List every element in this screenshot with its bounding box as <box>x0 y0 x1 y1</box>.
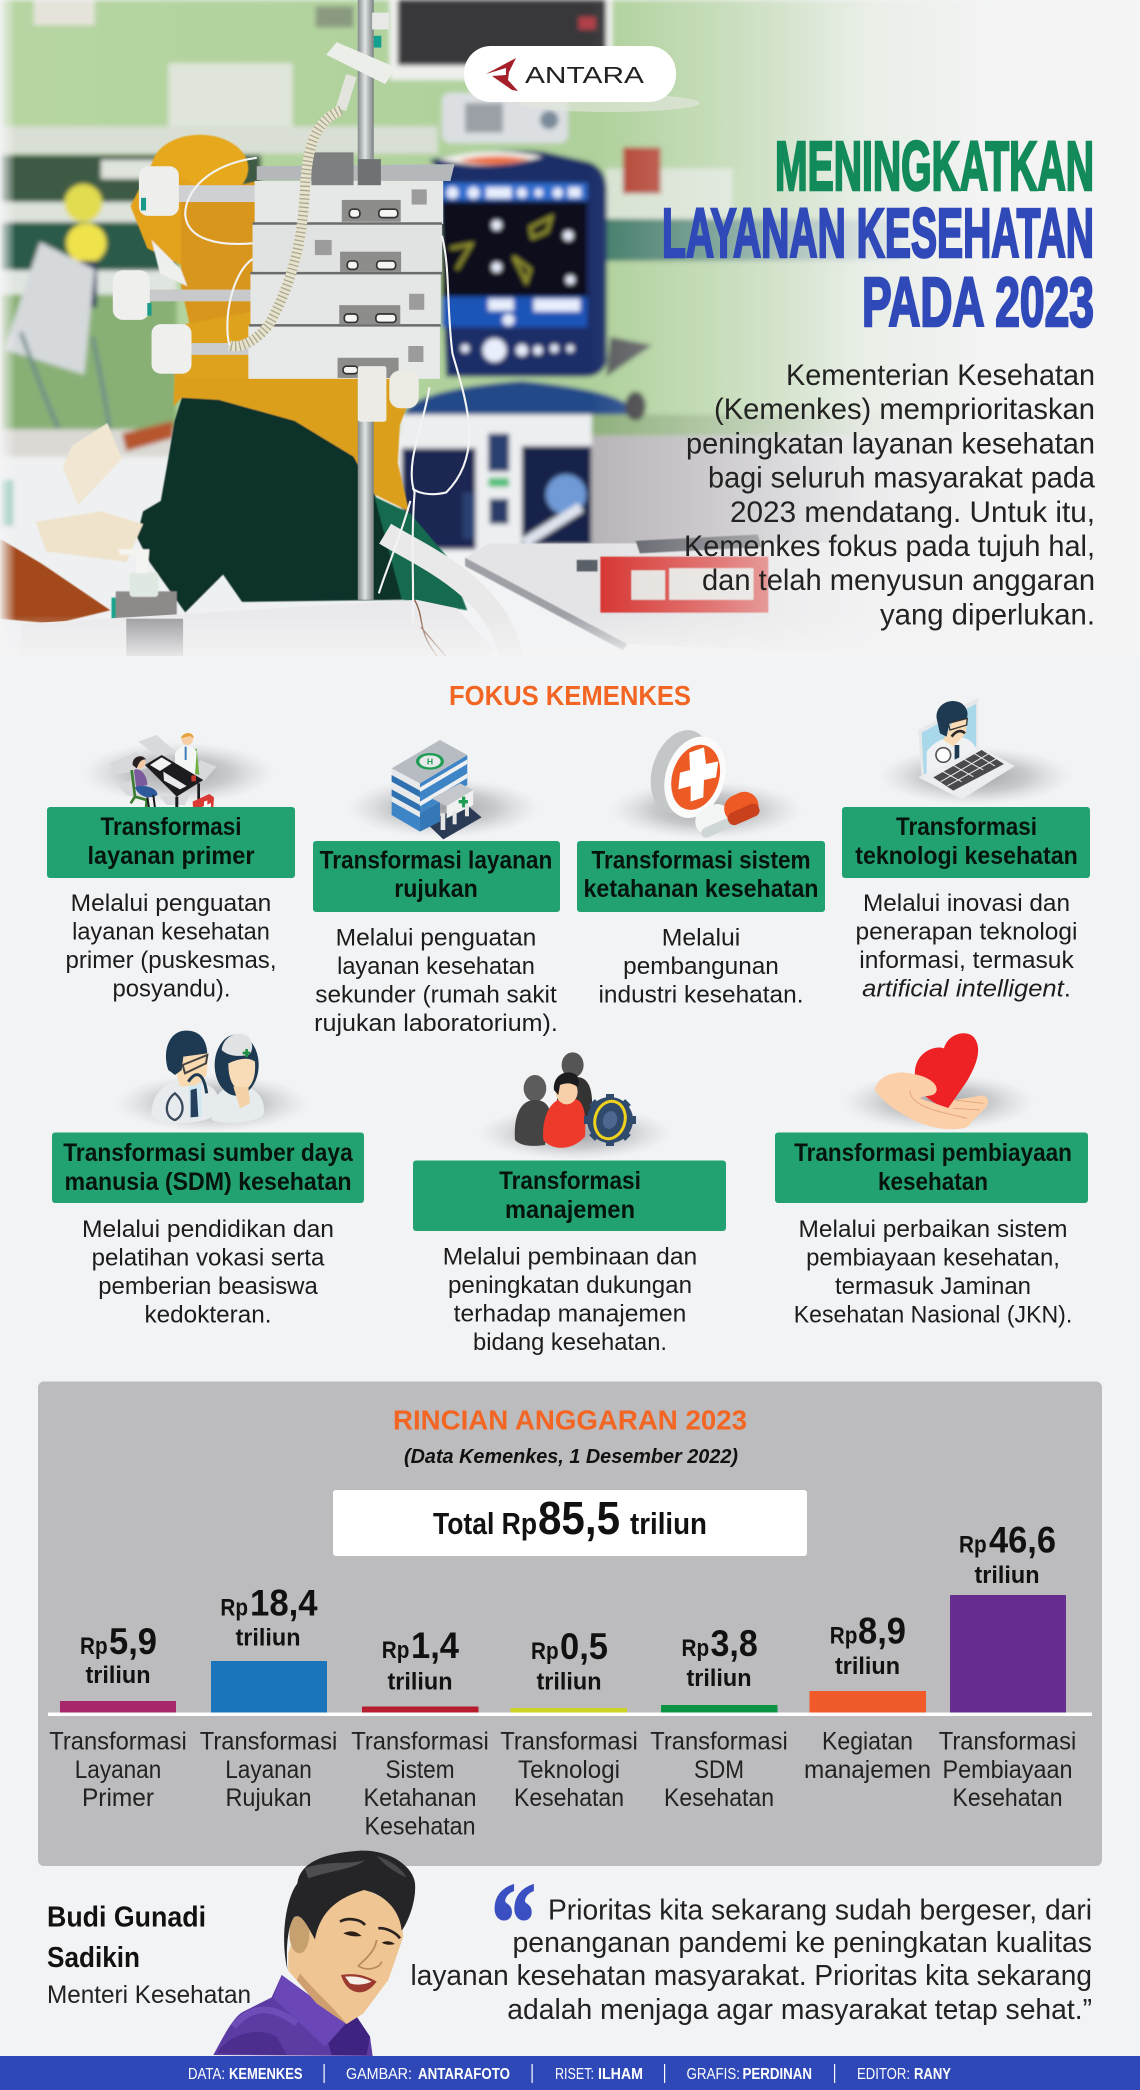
bar chart: Rp <box>220 1594 248 1622</box>
card: transformasi sumber daya manusia: pemberian beasiswa <box>98 1273 318 1300</box>
bar labels: Kegiatan <box>822 1728 913 1756</box>
card: transformasi layanan rujukan: rujukan <box>394 875 478 903</box>
card: transformasi teknologi kesehatan: Transformasi <box>896 813 1037 841</box>
heading: fokus kemenkes: FOKUS KEMENKES <box>449 680 691 711</box>
bar labels: Kesehatan <box>664 1784 774 1812</box>
bar chart: triliun <box>536 1668 602 1696</box>
card: transformasi manajemen: bidang kesehatan. <box>473 1329 667 1356</box>
card: transformasi layanan primer: layanan kesehatan <box>72 918 270 946</box>
total box: 85,5 <box>538 1492 620 1544</box>
antara logo pill: ANTARA <box>525 62 645 88</box>
bar labels: Transformasi <box>939 1728 1076 1756</box>
icon: people and gear <box>515 1052 592 1148</box>
quote text: Prioritas kita sekarang sudah bergeser, dari <box>548 1894 1092 1926</box>
bar chart: triliun <box>835 1653 900 1680</box>
card: transformasi layanan rujukan: Transformasi layanan <box>320 846 552 874</box>
quote text: penanganan pandemi ke peningkatan kualitas <box>512 1927 1092 1959</box>
card: transformasi layanan primer: layanan primer <box>88 842 255 870</box>
intro text: bagi seluruh masyarakat pada <box>708 462 1095 494</box>
bar chart: 0,5 <box>560 1626 608 1667</box>
minister name: Menteri Kesehatan <box>47 1981 251 2009</box>
card: transformasi sumber daya manusia: Transformasi sumber daya <box>63 1139 354 1167</box>
bar chart: triliun <box>236 1624 300 1652</box>
total box: Total Rp <box>433 1506 537 1541</box>
intro text: (Kemenkes) memprioritaskan <box>714 393 1095 426</box>
card: transformasi teknologi kesehatan: informasi, termasuk <box>859 947 1075 974</box>
heading: rincian anggaran: RINCIAN ANGGARAN 2023 <box>393 1404 747 1436</box>
bed rails <box>379 524 514 628</box>
card: transformasi layanan primer: posyandu). <box>112 976 230 1002</box>
card: transformasi layanan primer: primer (puskesmas, <box>66 947 276 974</box>
footer credits: KEMENKES <box>229 2066 303 2083</box>
minister name <box>47 1902 251 2009</box>
card: transformasi manajemen: terhadap manajemen <box>454 1300 686 1328</box>
card: transformasi sumber daya manusia: pelatihan vokasi serta <box>92 1244 325 1272</box>
card: transformasi teknologi kesehatan: Melalui inovasi dan <box>863 890 1070 917</box>
card: transformasi pembiayaan kesehatan: Kesehatan Nasional (JKN). <box>794 1302 1072 1328</box>
bar chart <box>48 1520 1092 1716</box>
footer credits: EDITOR: <box>857 2066 910 2083</box>
bar labels: Layanan <box>225 1756 312 1784</box>
card: transformasi layanan rujukan: sekunder (rumah sakit <box>315 982 557 1008</box>
bar labels: SDM <box>694 1756 744 1784</box>
icon: hand holding heart <box>875 1033 988 1129</box>
intro text: yang diperlukan. <box>880 598 1095 632</box>
bar labels: Transformasi <box>49 1728 187 1756</box>
source note: (Data Kemenkes, 1 Desember 2022) <box>404 1446 738 1468</box>
card: transformasi layanan primer: Transformasi <box>100 813 242 841</box>
intro text: Kementerian Kesehatan <box>786 359 1095 392</box>
bar chart: Rp <box>959 1532 987 1558</box>
bar chart: 3,8 <box>710 1623 758 1664</box>
nurse <box>0 134 859 650</box>
bar labels: Rujukan <box>226 1784 312 1812</box>
bar chart: 5,9 <box>109 1621 157 1662</box>
intro text <box>684 359 1095 632</box>
bar labels: Transformasi <box>500 1728 638 1756</box>
bar chart: triliun <box>686 1665 752 1692</box>
card: transformasi layanan rujukan: rujukan laboratorium). <box>314 1010 558 1037</box>
card: transformasi pembiayaan kesehatan: Melalui perbaikan sistem <box>798 1216 1068 1243</box>
footer credits <box>0 2056 1140 2090</box>
card: transformasi teknologi kesehatan <box>842 697 1090 1002</box>
card: transformasi manajemen: peningkatan dukungan <box>448 1272 692 1299</box>
card: transformasi sistem ketahanan kesehatan: industri kesehatan. <box>598 982 804 1008</box>
intro text: Kemenkes fokus pada tujuh hal, <box>684 530 1095 563</box>
bar labels: Transformasi <box>351 1728 489 1756</box>
total box: triliun <box>630 1506 707 1541</box>
card: transformasi layanan rujukan <box>313 740 560 1037</box>
card: transformasi manajemen: manajemen <box>505 1196 635 1224</box>
card: transformasi layanan rujukan: Melalui penguatan <box>336 924 536 952</box>
bar chart: 46,6 <box>989 1520 1056 1560</box>
footer credits: GAMBAR: <box>346 2066 412 2083</box>
card: transformasi pembiayaan kesehatan: Transformasi pembiayaan <box>794 1139 1072 1167</box>
bar labels: Primer <box>82 1784 154 1812</box>
monitor <box>429 150 607 377</box>
bar chart: Rp <box>531 1638 559 1665</box>
bar labels: Kesehatan <box>364 1812 476 1840</box>
bar labels: Teknologi <box>518 1756 620 1784</box>
card: transformasi layanan rujukan: layanan kesehatan <box>337 953 535 980</box>
card: transformasi pembiayaan kesehatan <box>775 1033 1088 1328</box>
icon: quote mark: “ <box>491 1860 536 1986</box>
bar chart: triliun <box>388 1668 452 1696</box>
background items <box>389 0 612 80</box>
footer credits: ANTARAFOTO <box>418 2066 510 2083</box>
card: transformasi sumber daya manusia: Melalui pendidikan dan <box>82 1216 334 1243</box>
bar chart: 1,4 <box>411 1625 459 1666</box>
icon: doctor on laptop <box>918 697 1015 799</box>
card: transformasi pembiayaan kesehatan: kesehatan <box>878 1168 988 1196</box>
bar labels <box>49 1728 1076 1840</box>
icon: hospital building: H <box>427 756 433 766</box>
card: transformasi sistem ketahanan kesehatan: ketahanan kesehatan <box>584 875 818 903</box>
quote text <box>410 1894 1092 2026</box>
patient bed <box>0 434 400 661</box>
card: transformasi pembiayaan kesehatan: termasuk Jaminan <box>835 1273 1031 1300</box>
footer credits: RANY <box>914 2066 951 2083</box>
bar labels: Layanan <box>75 1756 161 1784</box>
card: transformasi teknologi kesehatan: artificial intelligent . <box>862 976 1071 1002</box>
photo fades <box>590 0 1140 656</box>
quote text: adalah menjaga agar masyarakat tetap sehat.” <box>507 1994 1092 2026</box>
footer credits: ILHAM <box>598 2066 643 2083</box>
card: transformasi teknologi kesehatan: teknologi kesehatan <box>855 842 1078 870</box>
intro text: dan telah menyusun anggaran <box>702 564 1095 597</box>
card: transformasi sistem ketahanan kesehatan: Melalui <box>662 924 740 952</box>
card: transformasi pembiayaan kesehatan: pembiayaan kesehatan, <box>806 1244 1060 1272</box>
footer credits: RISET: <box>555 2066 594 2083</box>
bar chart: triliun <box>974 1562 1040 1589</box>
card: transformasi manajemen: Transformasi <box>499 1167 641 1195</box>
card: transformasi layanan primer: Melalui penguatan <box>71 890 271 917</box>
icon: minister portrait <box>213 1851 415 2056</box>
sanitizer <box>112 598 124 621</box>
panel: rincian anggaran <box>38 1382 1102 1866</box>
card: transformasi sumber daya manusia: manusia (SDM) kesehatan <box>64 1168 352 1196</box>
card: transformasi sistem ketahanan kesehatan: Transformasi sistem <box>592 846 810 874</box>
bar chart: triliun <box>86 1662 150 1689</box>
header photo: nurse beside IV pole and patient monitor <box>0 0 942 656</box>
footer credits: PERDINAN <box>742 2066 812 2083</box>
card: transformasi manajemen: Melalui pembinaan dan <box>443 1244 697 1270</box>
icon: antara logo mark <box>486 58 518 91</box>
card: transformasi layanan primer <box>47 733 295 1002</box>
total box <box>333 1490 807 1556</box>
bar chart: Rp <box>830 1622 857 1650</box>
icon: doctor and nurse <box>152 1031 264 1123</box>
ventilator stand <box>404 381 631 415</box>
bar labels: Kesehatan <box>952 1784 1062 1812</box>
card: transformasi sumber daya manusia: kedokteran. <box>144 1302 272 1328</box>
table and red box <box>465 542 1010 660</box>
bar labels: Kesehatan <box>514 1784 624 1812</box>
bar labels: Pembiayaan <box>942 1756 1072 1784</box>
bar chart: 8,9 <box>858 1610 906 1652</box>
icon: doctor consultation at desk <box>110 733 217 816</box>
bar labels: Transformasi <box>650 1728 788 1756</box>
icon: gear <box>584 1094 636 1146</box>
title box <box>47 807 295 878</box>
minister name: Budi Gunadi <box>47 1902 206 1934</box>
card: transformasi sumber daya manusia <box>52 1031 364 1328</box>
bar chart: Rp <box>382 1637 409 1664</box>
bar chart: 18,4 <box>250 1582 318 1624</box>
antara logo pill <box>464 46 700 112</box>
footer credits: GRAFIS: <box>686 2066 740 2083</box>
bar labels: manajemen <box>804 1756 931 1784</box>
icon: hospital building <box>392 740 482 839</box>
card: transformasi manajemen <box>413 1052 726 1356</box>
icon: medical sign and capsule <box>641 722 763 840</box>
bar labels: Ketahanan <box>364 1784 476 1812</box>
card: transformasi teknologi kesehatan: penerapan teknologi <box>856 918 1078 946</box>
intro text: 2023 mendatang. Untuk itu, <box>730 496 1095 529</box>
quote text: layanan kesehatan masyarakat. Prioritas kita sekarang <box>410 1960 1092 1992</box>
minister name: Sadikin <box>47 1942 140 1974</box>
title <box>662 127 1094 341</box>
bar chart: Rp <box>682 1635 709 1662</box>
footer credits: DATA: <box>188 2066 225 2083</box>
IV pump stack <box>113 0 469 623</box>
bar labels: Transformasi <box>200 1728 337 1756</box>
bar chart: Rp <box>80 1633 108 1660</box>
intro text: peningkatan layanan kesehatan <box>686 428 1095 460</box>
card: transformasi sistem ketahanan kesehatan <box>577 722 825 1008</box>
bar labels: Sistem <box>386 1756 454 1784</box>
card: transformasi sistem ketahanan kesehatan: pembangunan <box>623 953 779 980</box>
